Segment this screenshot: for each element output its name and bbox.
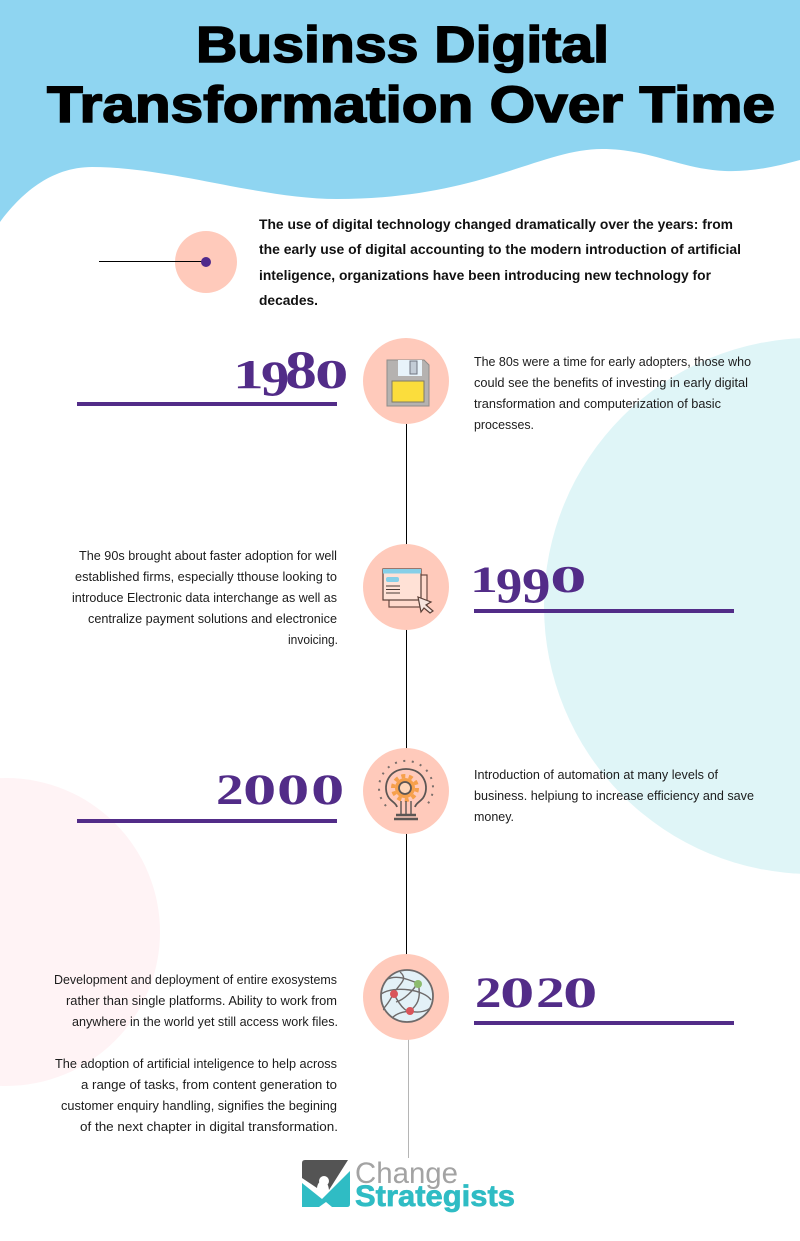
intro text: inteligence, organizations have been introducing new technology for: [259, 267, 712, 283]
text 2000: Introduction of automation at many levels of: [474, 768, 719, 782]
intro text: [259, 216, 741, 308]
year 2000: 2: [216, 767, 244, 814]
year 1990: 0: [550, 559, 587, 601]
intro text: the early use of digital accounting to the modern introduction of artificial: [259, 241, 741, 257]
icon: light bulb with gear: [363, 748, 449, 834]
text 2020: [54, 973, 338, 1134]
text 2020: rather than single platforms. Ability to work from: [66, 994, 337, 1008]
text 1980: transformation and computerization of basic: [474, 397, 721, 411]
title: Transformation Over Time: [47, 76, 775, 133]
logo: Change Strategists: Change: [355, 1157, 458, 1190]
year 2020: [475, 970, 598, 1017]
rule 1980: [77, 402, 337, 406]
background circle: teal: [544, 338, 800, 874]
rule 1990: [474, 609, 734, 613]
year 1980: 1: [233, 351, 264, 397]
title: Businss Digital: [196, 16, 609, 73]
icon: floppy disk: [363, 338, 449, 424]
text 1990: The 90s brought about faster adoption for well: [79, 549, 337, 563]
year 2020: 2: [536, 970, 565, 1017]
title: [47, 16, 775, 133]
text 1990: invoicing.: [288, 633, 338, 647]
year 1990: 9: [522, 557, 550, 613]
text 1990: [72, 549, 338, 647]
intro marker: [99, 231, 237, 293]
text 2000: [474, 768, 754, 824]
logo: Change Strategists: Strategists: [355, 1180, 515, 1213]
year 1980: 9: [261, 350, 289, 406]
year 2020: 0: [563, 970, 598, 1017]
year 2000: 0: [243, 767, 277, 814]
text 1980: [474, 355, 751, 432]
text 1990: introduce Electronic data interchange as well as: [72, 591, 337, 605]
year 2020: 2: [475, 970, 502, 1017]
intro text: The use of digital technology changed dramatically over the years: from: [259, 216, 733, 232]
text 2020: Development and deployment of entire exosystems: [54, 973, 337, 987]
text 2020: a range of tasks, from content generation to: [81, 1078, 337, 1092]
year 1990: 1: [470, 560, 498, 601]
year 1990: [470, 557, 587, 613]
text 1980: The 80s were a time for early adopters, those who: [474, 355, 751, 369]
year 1980: 8: [285, 340, 317, 400]
text 2000: money.: [474, 810, 514, 824]
rule 2020: [474, 1021, 734, 1025]
icon: browser window with cursor: [363, 544, 449, 630]
logo: Change Strategists: [302, 1157, 515, 1213]
text 1980: processes.: [474, 418, 534, 432]
timeline line: [406, 420, 408, 960]
header wave: [0, 0, 800, 222]
text 2020: of the next chapter in digital transformation.: [80, 1120, 338, 1134]
background circle: pink: [0, 778, 160, 1086]
rule 2000: [77, 819, 337, 823]
text 1990: established firms, especially tthouse looking to: [75, 570, 337, 584]
year 2000: [216, 767, 345, 814]
year 1980: [233, 340, 349, 406]
text 2020: anywhere in the world yet still access work files.: [72, 1015, 338, 1029]
intro text: decades.: [259, 292, 318, 308]
text 2020: customer enquiry handling, signifies the begining: [61, 1099, 337, 1113]
text 1990: centralize payment solutions and electronice: [88, 612, 337, 626]
year 2000: 0: [277, 767, 310, 814]
timeline line: lower grey: [408, 1036, 410, 1158]
year 2020: 0: [500, 970, 535, 1017]
icon: network globe: [363, 954, 449, 1040]
year 1980: 0: [315, 351, 349, 397]
text 2000: business. helpiung to increase efficiency and save: [474, 789, 754, 803]
year 2000: 0: [311, 767, 345, 814]
text 2020: The adoption of artificial inteligence to help across: [55, 1057, 337, 1071]
text 1980: could see the benefits of investing in early digital: [474, 376, 748, 390]
year 1990: 9: [496, 557, 522, 613]
